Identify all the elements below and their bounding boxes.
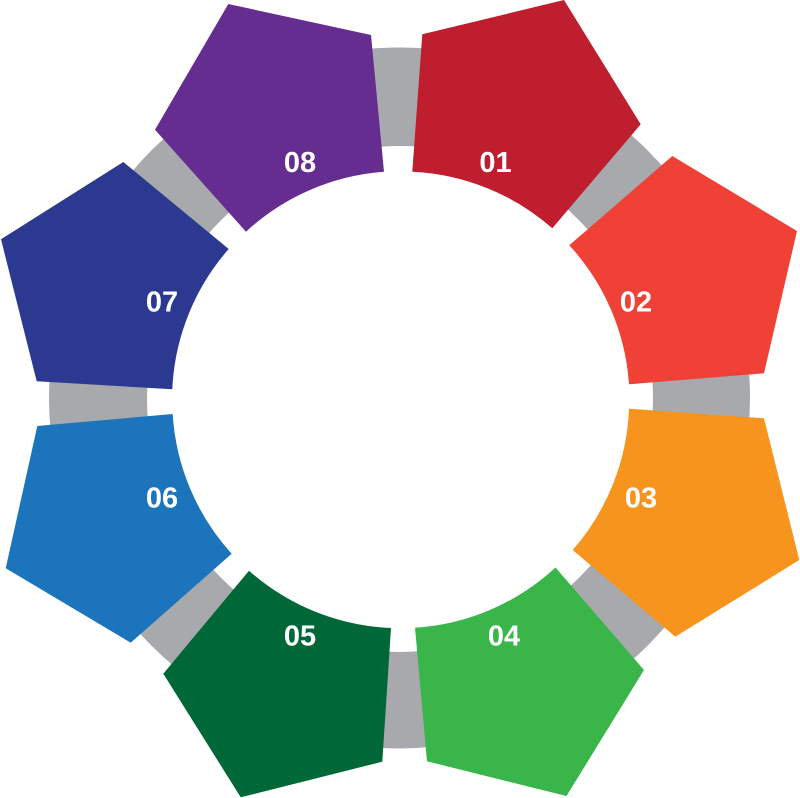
- segment 02: [569, 156, 797, 384]
- label 08: 08: [284, 147, 316, 179]
- segment 08: [155, 4, 384, 232]
- label 04: 04: [488, 620, 520, 652]
- label 03: 03: [625, 482, 657, 514]
- segment 01: [412, 0, 641, 228]
- label 05: 05: [284, 620, 316, 652]
- segment 03: [573, 409, 799, 637]
- segment 07: [1, 162, 229, 389]
- segment 04: [415, 568, 644, 796]
- label 06: 06: [146, 482, 178, 514]
- segment 06: [6, 414, 232, 643]
- label 07: 07: [146, 286, 178, 318]
- label 01: 01: [479, 147, 512, 179]
- label 02: 02: [620, 286, 652, 318]
- segment 05: [163, 571, 391, 797]
- grey connecting ring: [49, 48, 750, 749]
